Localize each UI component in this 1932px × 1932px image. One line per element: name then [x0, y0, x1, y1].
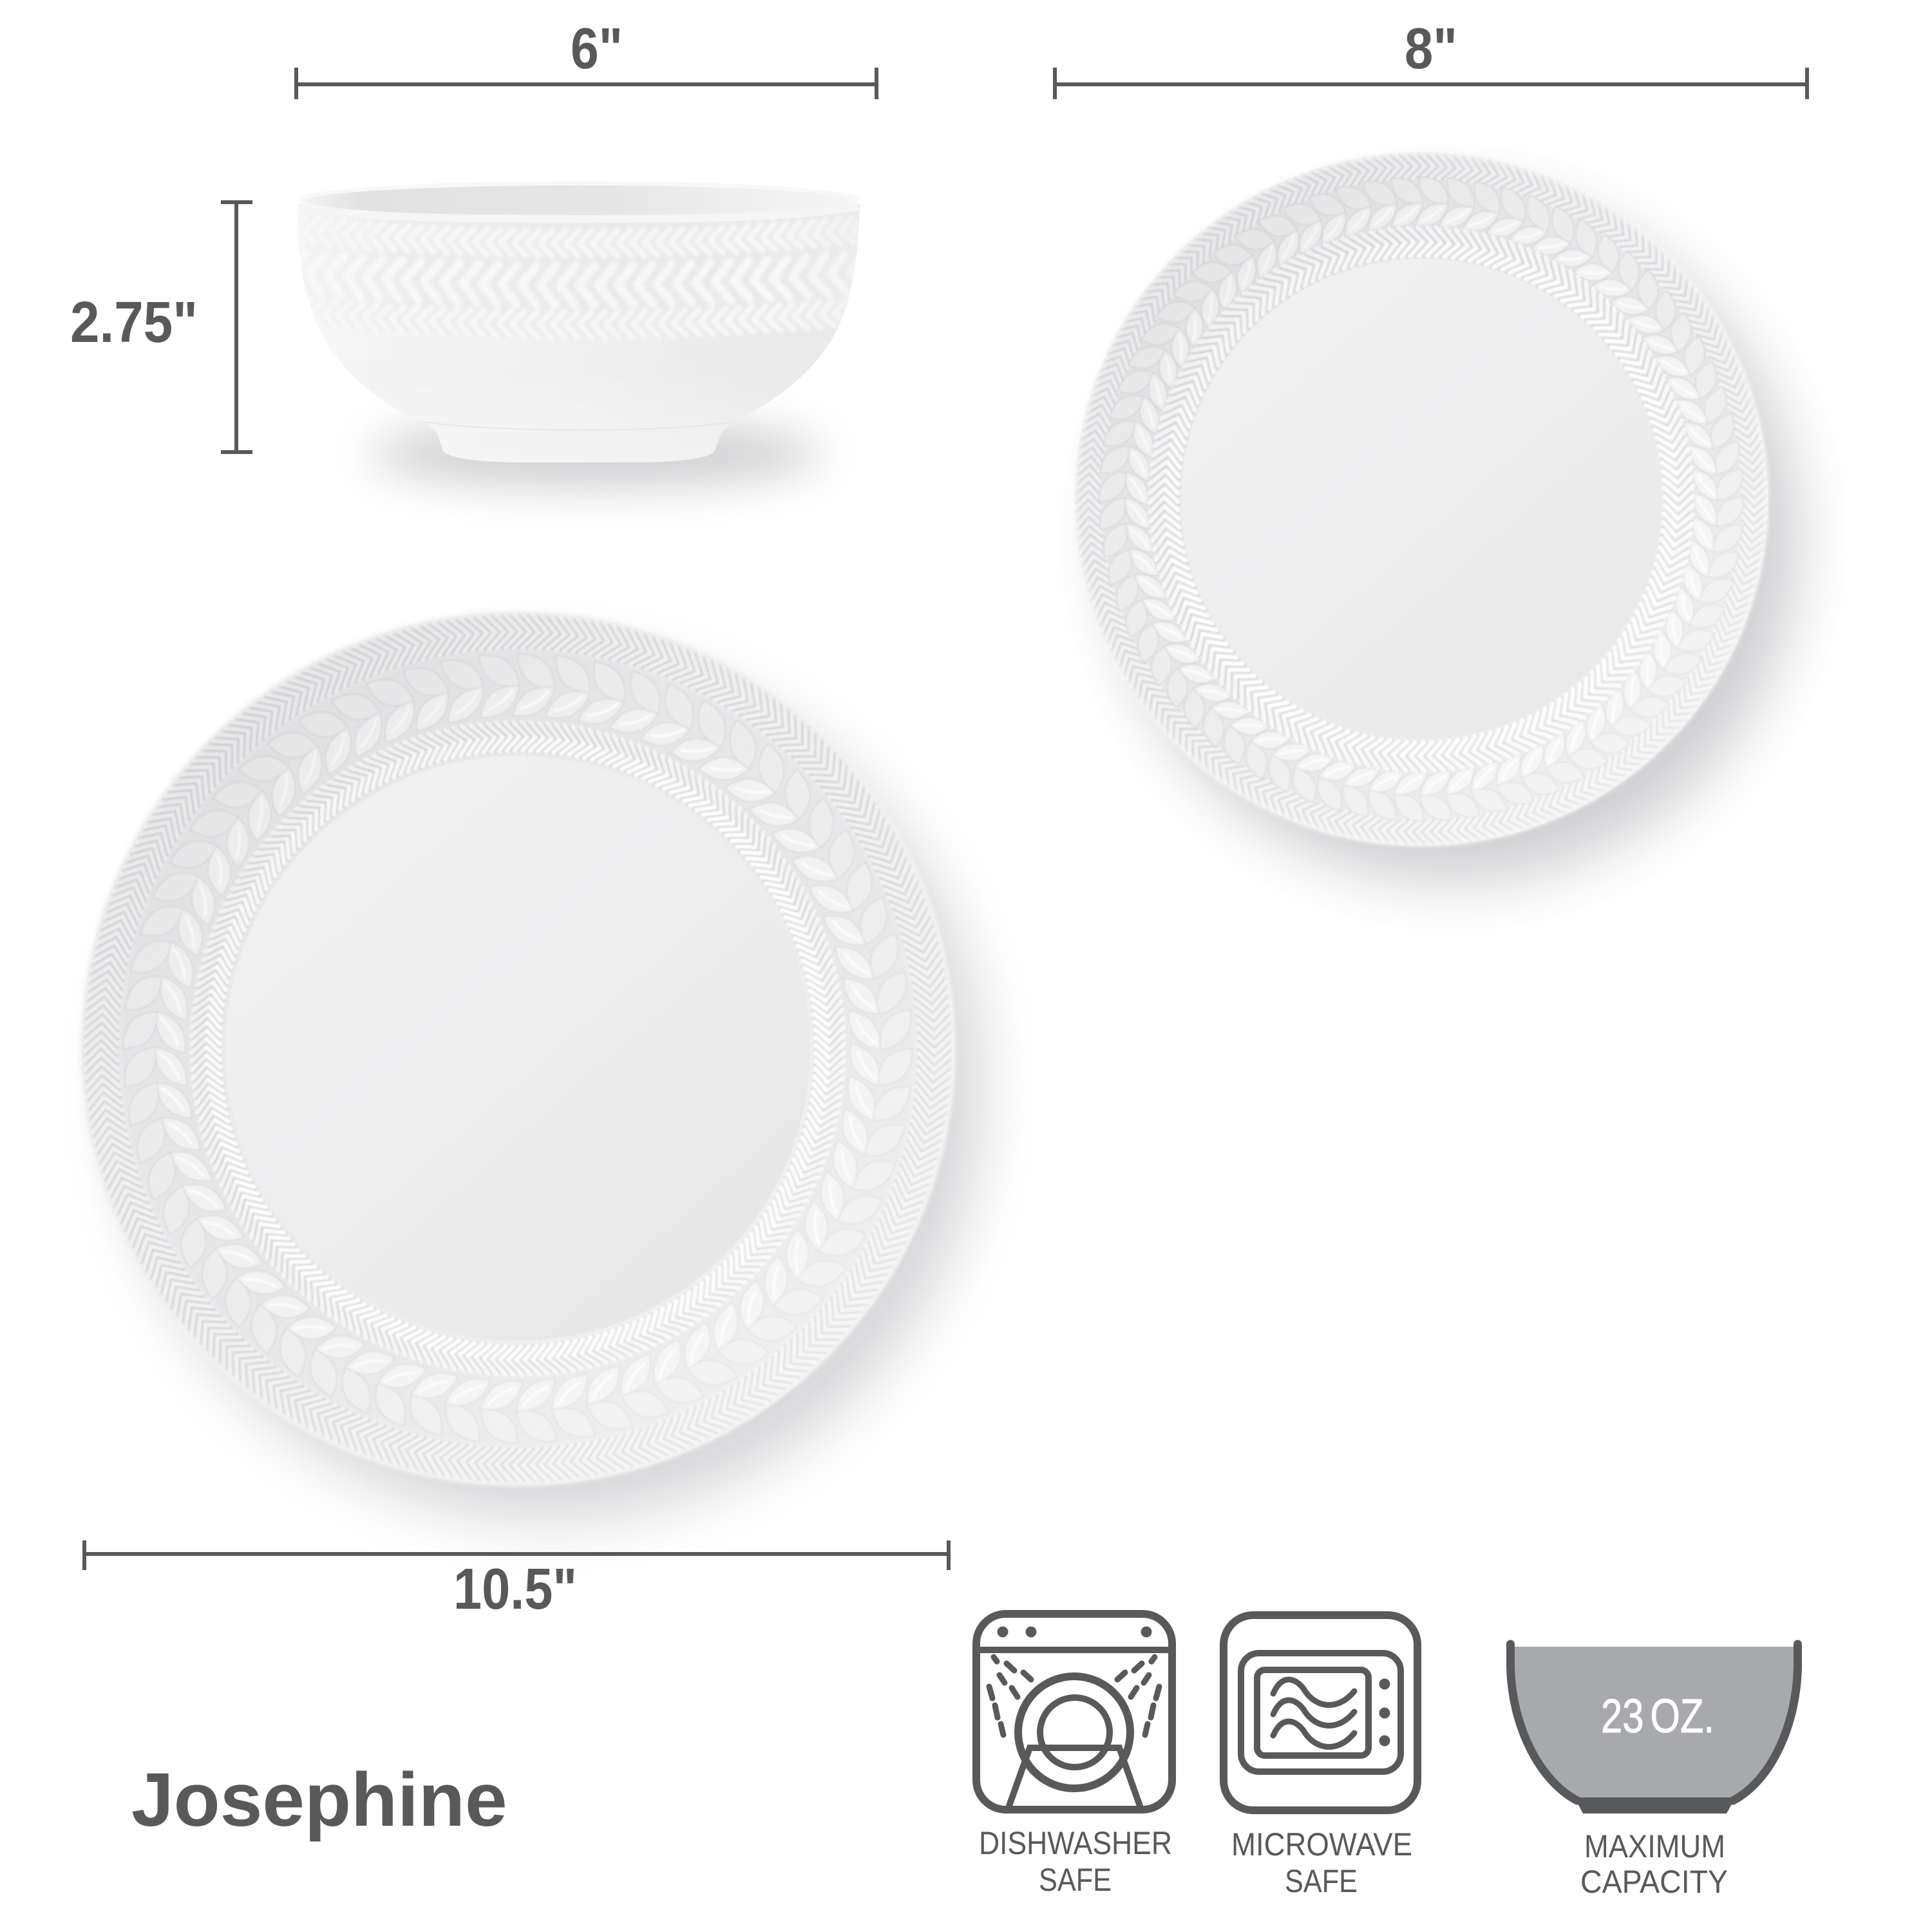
label: dishwasher safe	[979, 1825, 1172, 1898]
large plate width dimension: 10.5"	[453, 1557, 577, 1622]
icon: microwave safe	[1224, 1615, 1417, 1810]
large plate shadow	[117, 654, 983, 1520]
bowl height dimension	[70, 202, 252, 452]
label: microwave safe: SAFE	[1285, 1863, 1358, 1899]
bowl lip highlight	[299, 206, 858, 219]
small plate shadow	[1109, 193, 1798, 882]
large plate rim	[81, 612, 954, 1485]
bowl fill	[1510, 1647, 1798, 1799]
bowl width dimension	[296, 17, 876, 99]
label: maximum capacity	[1580, 1828, 1728, 1900]
bowl body	[298, 204, 860, 462]
small plate photo	[1037, 115, 1805, 883]
small plate width dimension	[1055, 17, 1807, 99]
label: dishwasher safe: DISHWASHER	[979, 1825, 1172, 1861]
bowl height dimension: 2.75"	[70, 290, 198, 355]
large plate well	[225, 756, 810, 1341]
icon: dishwasher safe	[976, 1614, 1172, 1810]
label: microwave safe: MICROWAVE	[1231, 1826, 1412, 1862]
bowl shadow	[370, 421, 821, 488]
small plate well	[1181, 259, 1662, 739]
large plate width dimension	[84, 1540, 949, 1622]
bowl photo	[266, 147, 915, 488]
label: dishwasher safe: SAFE	[1039, 1862, 1112, 1898]
bowl foot line	[426, 422, 732, 430]
bowl outline	[1511, 1644, 1798, 1801]
bowl width dimension: 6"	[571, 17, 623, 81]
small plate width dimension: 8"	[1405, 17, 1457, 81]
label: microwave safe	[1231, 1826, 1412, 1899]
small plate rim	[1075, 153, 1768, 846]
collection name: Josephine	[131, 1757, 507, 1842]
bowl woven bands	[603, 215, 859, 336]
bowl base	[1575, 1797, 1736, 1814]
capacity value: 23 OZ.	[1601, 1689, 1714, 1743]
label: maximum capacity: MAXIMUM	[1584, 1828, 1725, 1864]
bowl interior	[298, 181, 860, 217]
large plate photo	[35, 566, 1000, 1531]
icon: maximum capacity bowl	[1510, 1644, 1798, 1814]
label: maximum capacity: CAPACITY	[1580, 1864, 1728, 1900]
